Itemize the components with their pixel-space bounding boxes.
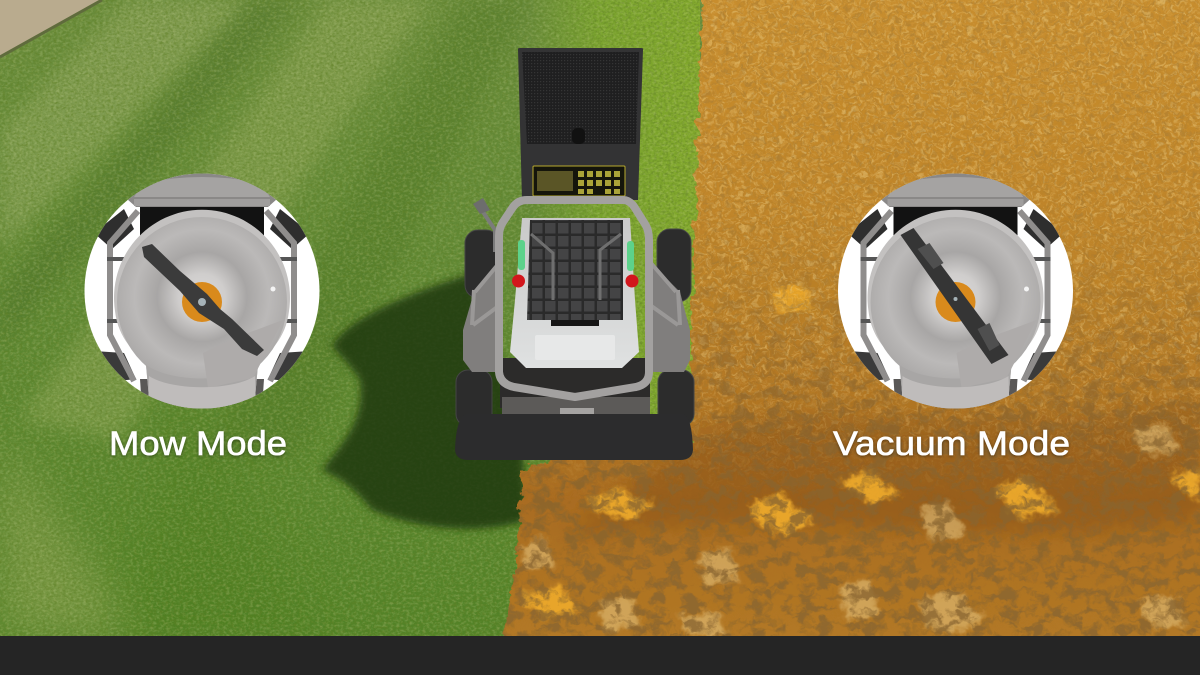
body bbox=[510, 218, 639, 368]
blade: mow bbox=[142, 244, 264, 356]
wheels bbox=[456, 229, 694, 426]
grass catcher bbox=[518, 48, 643, 200]
label: vacuum mode: Vacuum Mode bbox=[833, 425, 1070, 463]
panel: mow mode bbox=[84, 173, 320, 463]
mirror handle bbox=[473, 198, 495, 252]
label: mow mode: Mow Mode bbox=[109, 425, 287, 463]
hub bbox=[182, 282, 222, 322]
bottom bar bbox=[0, 636, 1200, 675]
warning label bbox=[533, 166, 625, 196]
grass field bbox=[0, 0, 720, 636]
deck diagram: vacuum bbox=[838, 173, 1074, 409]
sidewalk bbox=[0, 0, 102, 57]
rear structure bbox=[500, 358, 650, 408]
autumn leaves bbox=[502, 0, 1200, 636]
green lights bbox=[518, 240, 525, 270]
panel: vacuum mode bbox=[833, 173, 1074, 463]
side frame bbox=[463, 262, 499, 372]
blade: vacuum bbox=[900, 228, 1008, 364]
hub bbox=[936, 282, 976, 322]
battery cover bbox=[527, 220, 623, 326]
mower shadow bbox=[322, 274, 528, 529]
red buttons bbox=[512, 274, 525, 288]
deck diagram: mow bbox=[84, 173, 320, 409]
roll bar bbox=[499, 200, 649, 397]
mower bbox=[455, 48, 694, 460]
bumper bbox=[455, 414, 693, 460]
